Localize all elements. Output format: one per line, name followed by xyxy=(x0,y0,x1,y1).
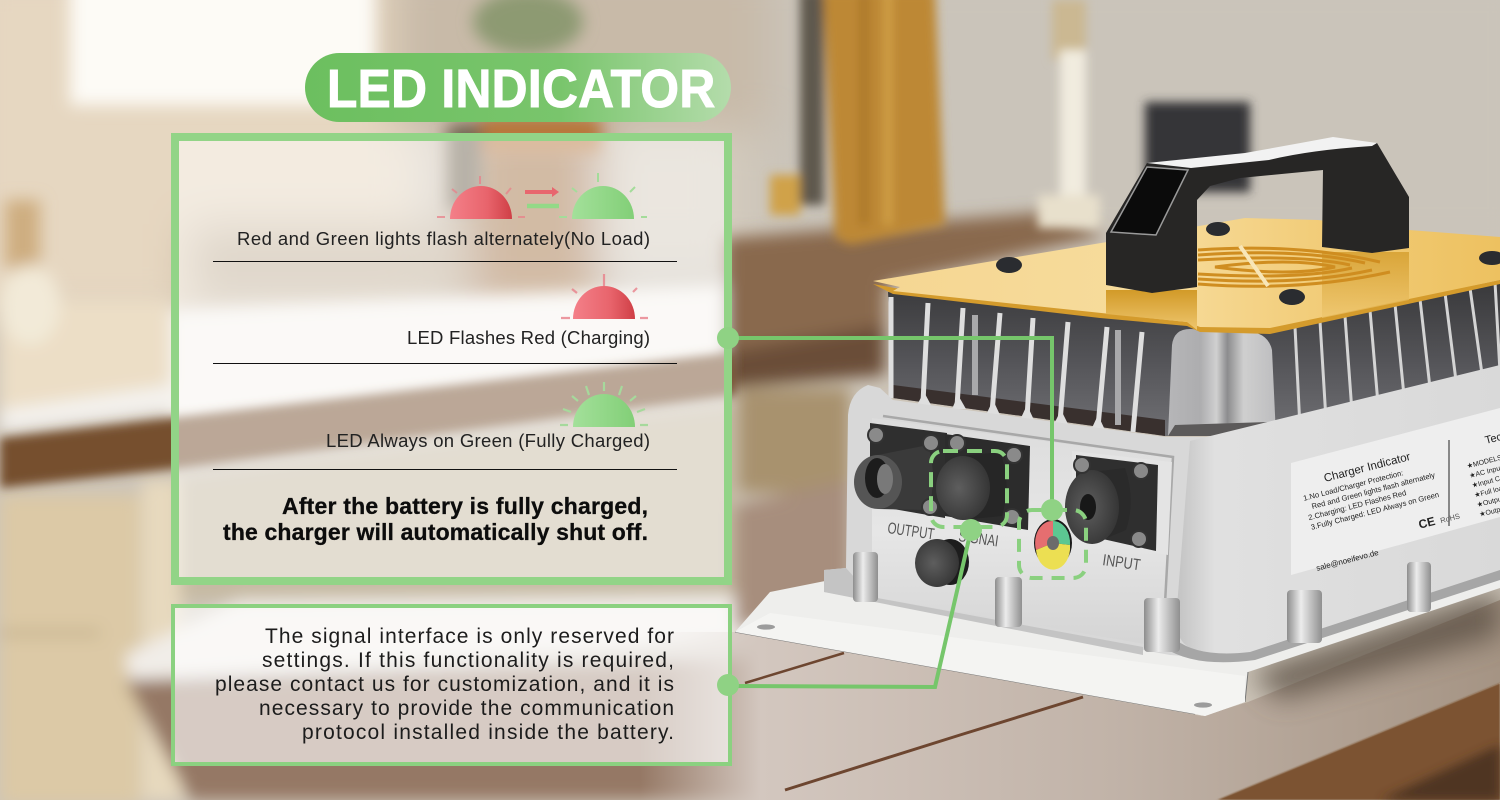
heat sink fins xyxy=(888,280,1500,436)
panel: signal interface note: settings. If this functionality is required, xyxy=(262,649,674,672)
wooden table xyxy=(640,590,1500,800)
label: LED Always on Green (Fully Charged) xyxy=(326,430,650,451)
sticker text: charger indicator: Charger Indicator xyxy=(1323,451,1412,485)
sticker text: charger indicator: 1.No Load/Charger Protection: xyxy=(1302,468,1404,503)
dashed highlight: LED indicator xyxy=(1019,510,1086,578)
panel: signal interface note: protocol installed inside the battery. xyxy=(302,721,674,744)
panel: LED indicator states xyxy=(175,137,728,581)
auto shut-off note xyxy=(223,493,648,545)
sticker text: charger indicator: 3.Fully Charged: LED Always on Green xyxy=(1310,490,1440,532)
sticker text: charger indicator: 2.Charging: LED Flashes Red xyxy=(1307,488,1407,522)
dashed highlight: signal port xyxy=(931,451,1007,527)
silver housing xyxy=(824,365,1500,662)
panel: signal interface note: please contact us for customization, and it is xyxy=(215,673,674,696)
product sticker xyxy=(1291,408,1500,575)
row: charging xyxy=(407,274,650,348)
sticker text: charger indicator: RoHS xyxy=(1439,511,1461,525)
output connector xyxy=(854,423,947,518)
row: no load xyxy=(237,173,650,249)
auto shut-off note: the charger will automatically shut off. xyxy=(223,519,648,545)
label: Red and Green lights flash alternately(No Load) xyxy=(237,228,650,249)
icon: red light xyxy=(437,176,525,219)
mounting base plate xyxy=(735,578,1500,716)
black handle xyxy=(1106,137,1409,293)
sticker text: charger indicator: Red and Green lights flash alternately xyxy=(1311,470,1436,511)
input connector xyxy=(1065,451,1172,555)
yellow top plate xyxy=(873,218,1500,334)
charger product photo xyxy=(735,137,1500,716)
sticker text: charger indicator: sale@noeifevo.de xyxy=(1315,548,1380,573)
port labels xyxy=(886,520,1142,574)
label: LED Flashes Red (Charging) xyxy=(407,327,650,348)
plate rivets xyxy=(996,222,1500,305)
panel connector nodes xyxy=(717,327,739,696)
icon: red light xyxy=(561,274,648,319)
callout connector lines xyxy=(728,338,1052,687)
icon: alternating arrows xyxy=(525,187,559,206)
row: fully charged xyxy=(326,382,650,451)
sticker text: charger indicator: CE xyxy=(1417,514,1437,532)
title pill: LED INDICATOR xyxy=(327,58,715,118)
panel: signal interface note xyxy=(173,606,730,764)
signal connector xyxy=(936,434,1030,530)
icon: green light xyxy=(559,173,647,219)
port labels: SIGNAI xyxy=(957,528,999,551)
port labels: OUTPUT xyxy=(886,520,936,544)
mounting pegs xyxy=(853,552,1431,652)
auto shut-off note: After the battery is fully charged, xyxy=(282,493,648,519)
connector nodes xyxy=(960,499,1063,541)
sticker text: technical specs xyxy=(1461,430,1500,519)
panel: signal interface note: necessary to provide the communication xyxy=(259,697,674,720)
sticker text: charger indicator xyxy=(1294,443,1465,573)
small black knob xyxy=(915,539,969,587)
panel: signal interface note: The signal interface is only reserved for xyxy=(265,625,674,648)
port labels: INPUT xyxy=(1101,552,1142,574)
LED status dial xyxy=(1034,519,1072,570)
icon: green light xyxy=(560,382,648,427)
